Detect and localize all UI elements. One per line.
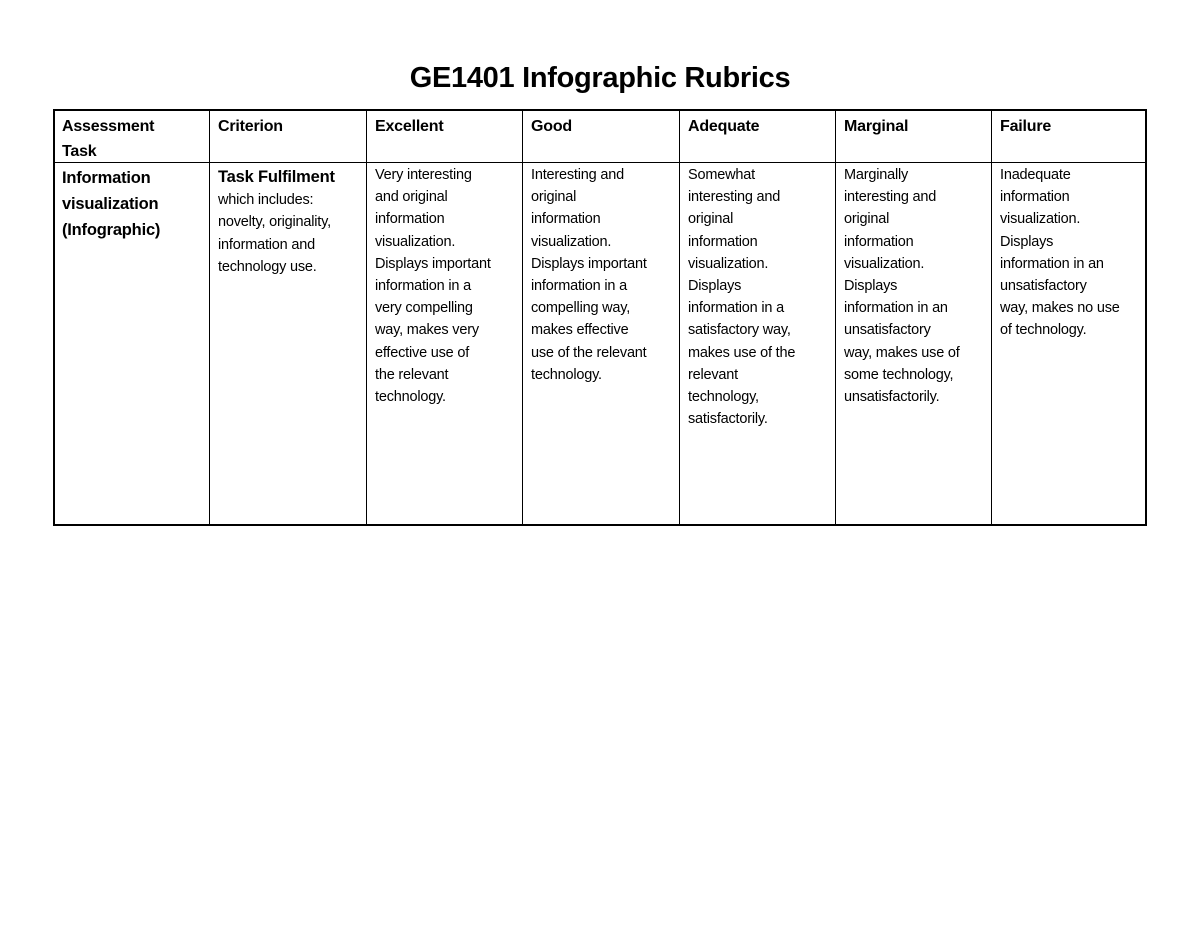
excellent cell: information [375, 211, 445, 227]
marginal cell: Marginally [844, 167, 908, 183]
task cell: Information [62, 169, 151, 187]
adequate cell: visualization. [688, 256, 768, 272]
criterion cell [218, 168, 335, 275]
good cell: compelling way, [531, 300, 630, 316]
failure cell: way, makes no use [1000, 300, 1120, 316]
adequate cell: information [688, 234, 758, 250]
marginal cell [844, 167, 960, 405]
header: assessment task: Task [62, 143, 96, 160]
adequate cell: technology, [688, 389, 759, 405]
excellent cell: way, makes very [375, 322, 479, 338]
adequate cell: satisfactory way, [688, 322, 791, 338]
title: GE1401 Infographic Rubrics [410, 62, 790, 94]
marginal cell: information in an [844, 300, 948, 316]
failure cell: information [1000, 189, 1070, 205]
excellent cell: visualization. [375, 234, 455, 250]
header: criterion: Criterion [218, 118, 283, 135]
header: good: Good [531, 118, 572, 135]
task cell: (Infographic) [62, 221, 160, 239]
failure cell: Displays [1000, 234, 1053, 250]
excellent cell: the relevant [375, 367, 448, 383]
failure cell [1000, 167, 1120, 338]
excellent cell: effective use of [375, 345, 469, 361]
good cell: Interesting and [531, 167, 624, 183]
criterion cell: novelty, originality, [218, 214, 331, 230]
failure cell: unsatisfactory [1000, 278, 1087, 294]
adequate cell: satisfactorily. [688, 411, 768, 427]
good cell: visualization. [531, 234, 611, 250]
header: marginal: Marginal [844, 118, 908, 135]
header: adequate: Adequate [688, 118, 759, 135]
excellent cell: and original [375, 189, 448, 205]
header: excellent: Excellent [375, 118, 443, 135]
rubric table [53, 109, 1147, 526]
good cell: information in a [531, 278, 627, 294]
excellent cell: technology. [375, 389, 446, 405]
excellent cell: Displays important [375, 256, 491, 272]
adequate cell: original [688, 211, 733, 227]
adequate cell: Somewhat [688, 167, 755, 183]
marginal cell: some technology, [844, 367, 953, 383]
marginal cell: unsatisfactory [844, 322, 931, 338]
criterion cell: which includes: [218, 192, 313, 208]
failure cell: Inadequate [1000, 167, 1071, 183]
marginal cell: way, makes use of [844, 345, 960, 361]
criterion cell: technology use. [218, 259, 317, 275]
adequate cell [688, 167, 795, 427]
task cell [62, 169, 160, 239]
marginal cell: original [844, 211, 889, 227]
good cell: information [531, 211, 601, 227]
marginal cell: information [844, 234, 914, 250]
good cell [531, 167, 647, 383]
criterion cell: information and [218, 237, 315, 253]
good cell: original [531, 189, 576, 205]
adequate cell: makes use of the [688, 345, 795, 361]
criterion cell: Task Fulfilment [218, 168, 335, 186]
excellent cell [375, 167, 491, 405]
good cell: use of the relevant [531, 345, 646, 361]
good cell: makes effective [531, 322, 628, 338]
marginal cell: Displays [844, 278, 897, 294]
excellent cell: very compelling [375, 300, 473, 316]
good cell: technology. [531, 367, 602, 383]
marginal cell: interesting and [844, 189, 936, 205]
header: assessment task: Assessment [62, 118, 154, 135]
failure cell: visualization. [1000, 211, 1080, 227]
failure cell: information in an [1000, 256, 1104, 272]
failure cell: of technology. [1000, 322, 1086, 338]
adequate cell: information in a [688, 300, 784, 316]
adequate cell: interesting and [688, 189, 780, 205]
good cell: Displays important [531, 256, 647, 272]
task cell: visualization [62, 195, 158, 213]
marginal cell: visualization. [844, 256, 924, 272]
adequate cell: Displays [688, 278, 741, 294]
adequate cell: relevant [688, 367, 738, 383]
excellent cell: Very interesting [375, 167, 472, 183]
header: assessment task [62, 118, 154, 160]
header: failure: Failure [1000, 118, 1051, 135]
marginal cell: unsatisfactorily. [844, 389, 939, 405]
excellent cell: information in a [375, 278, 471, 294]
